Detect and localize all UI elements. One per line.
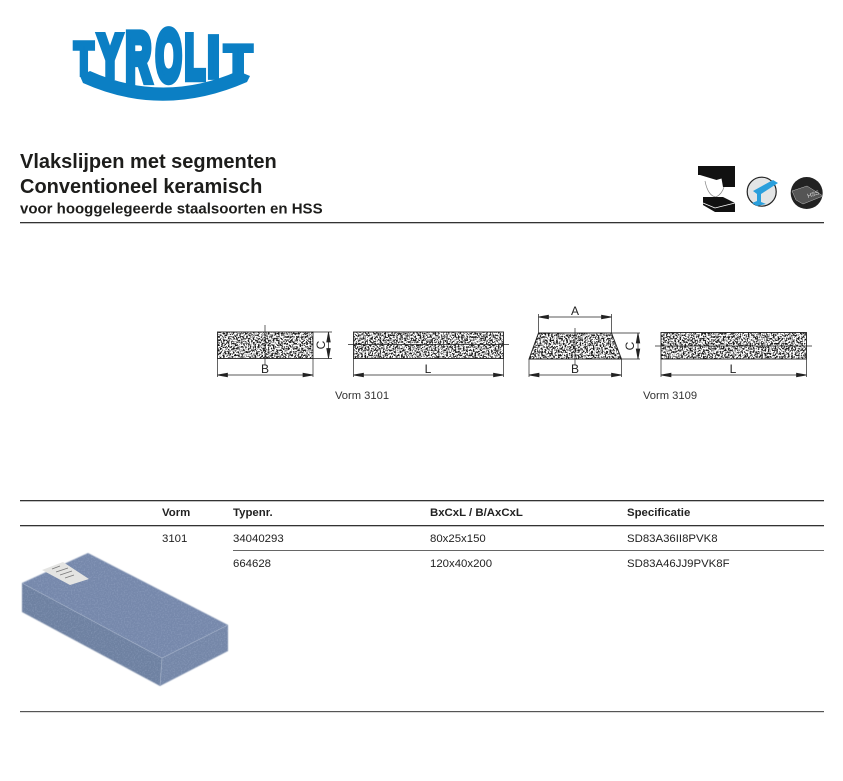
icon: dark disc with label — [791, 177, 823, 209]
logo lettering: T — [225, 37, 252, 84]
logo: Tyrolit — [74, 17, 252, 101]
dimension labels: L — [730, 362, 737, 376]
table header: BxCxL / B/AxCxL — [430, 507, 523, 519]
cross-section block — [218, 325, 313, 365]
length block — [655, 332, 812, 359]
table header: Typenr. — [233, 507, 273, 519]
product label — [42, 562, 89, 585]
row 1 — [162, 533, 718, 545]
dimensions — [529, 314, 806, 377]
row 1: 34040293 — [233, 533, 284, 545]
logo lettering: Y — [98, 25, 122, 90]
row 1: SD83A36II8PVK8 — [627, 533, 718, 545]
logo lettering — [74, 17, 252, 96]
dimension labels: C — [623, 341, 637, 350]
product photo: grinding segment — [20, 550, 230, 688]
row 2 — [233, 558, 730, 570]
caption: Vorm 3101 — [335, 390, 389, 402]
table header: Specificatie — [627, 507, 690, 519]
title line 2: Conventioneel keramisch — [20, 176, 262, 198]
dimension labels: B — [261, 362, 269, 376]
technical drawing: Vorm 3101 — [218, 325, 509, 402]
product table — [20, 500, 824, 712]
icon: dark disc with label: HSS — [807, 190, 820, 200]
logo lettering: O — [156, 17, 182, 96]
length block — [348, 332, 509, 358]
row 1: 80x25x150 — [430, 533, 486, 545]
logo lettering: L — [185, 22, 205, 92]
row 1: 3101 — [162, 533, 187, 545]
dimension labels: B — [571, 362, 579, 376]
row 2: SD83A46JJ9PVK8F — [627, 558, 730, 570]
row 2: 120x40x200 — [430, 558, 492, 570]
dimension labels — [571, 304, 737, 376]
dimension labels: A — [571, 304, 579, 318]
logo lettering: R — [126, 18, 151, 96]
dimension labels: C — [314, 340, 328, 349]
subtitle: voor hooggelegeerde staalsoorten en HSS — [20, 200, 323, 218]
table header — [162, 507, 690, 519]
trapezoid section — [525, 328, 625, 365]
row 2: 664628 — [233, 558, 271, 570]
dimensions — [218, 332, 504, 377]
heading block — [20, 151, 323, 218]
icon: grinding segment — [698, 166, 735, 212]
caption: Vorm 3109 — [643, 390, 697, 402]
dimension labels — [261, 340, 432, 376]
logo arch band — [80, 71, 250, 101]
icon: steel beam — [747, 177, 778, 206]
technical drawing: Vorm 3109 — [525, 304, 812, 402]
dimension labels: L — [425, 362, 432, 376]
logo lettering: I — [208, 25, 219, 89]
logo lettering: T — [74, 35, 94, 85]
title line 1: Vlakslijpen met segmenten — [20, 151, 277, 173]
header rule — [20, 222, 824, 223]
table header: Vorm — [162, 507, 190, 519]
